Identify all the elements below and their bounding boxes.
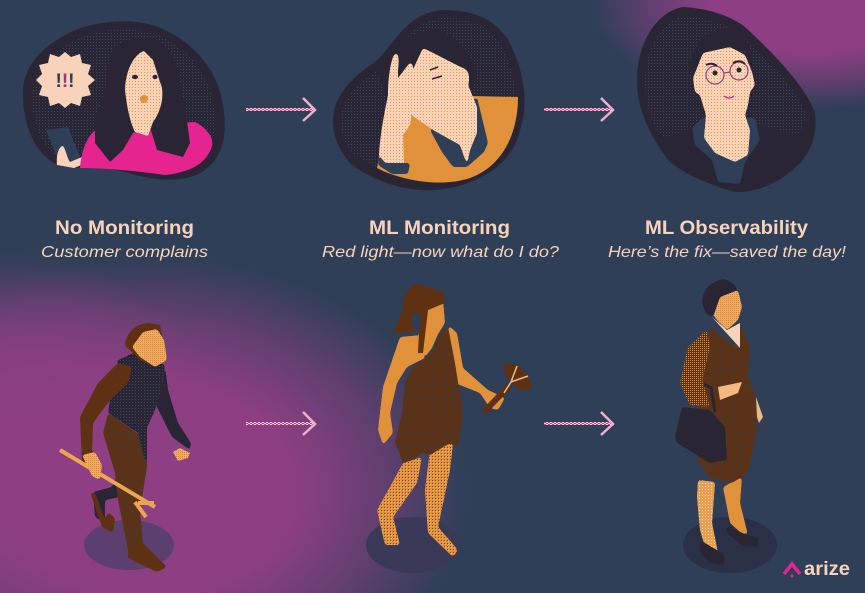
neck and face bbox=[400, 48, 477, 165]
eyes and mouth bbox=[706, 61, 745, 98]
icon: speech burst: !!! bbox=[56, 71, 74, 92]
caption: here's the fix: Here’s the fix—saved the day! bbox=[608, 244, 847, 261]
heading: ml observability: ML Observability bbox=[645, 218, 808, 239]
shadow bbox=[84, 520, 174, 570]
sleeve bbox=[680, 330, 710, 407]
back leg bbox=[723, 477, 748, 535]
dark arm bbox=[155, 365, 191, 450]
icon: arize arrow bbox=[784, 564, 800, 574]
eye bbox=[430, 67, 442, 79]
hair bbox=[393, 284, 445, 353]
figure: early human bbox=[60, 323, 191, 572]
left arm bbox=[378, 335, 425, 445]
face bbox=[415, 300, 445, 357]
arrow: bottom right bbox=[544, 412, 613, 435]
neck and face bbox=[693, 47, 755, 162]
bag bbox=[675, 407, 727, 463]
front shoe bbox=[700, 540, 725, 565]
hair bbox=[377, 30, 477, 95]
arrow: top left bbox=[246, 98, 315, 121]
back leg bbox=[377, 457, 422, 545]
hand bbox=[718, 382, 742, 400]
right hand bbox=[756, 397, 763, 423]
pink top bbox=[80, 122, 212, 175]
hand and arm bbox=[379, 54, 413, 163]
cuff bbox=[378, 155, 410, 174]
panel: ml observability portrait bbox=[637, 7, 816, 192]
panel: ml monitoring portrait bbox=[333, 10, 525, 190]
caption: customer complains: Customer complains bbox=[41, 244, 208, 261]
eyes and mouth bbox=[132, 75, 158, 103]
club bbox=[60, 450, 155, 517]
shadow bbox=[366, 517, 460, 573]
front leg bbox=[425, 443, 458, 557]
left hand bbox=[82, 452, 102, 480]
arrow: top right bbox=[544, 98, 613, 121]
jacket and skirt bbox=[695, 323, 757, 483]
collar bbox=[692, 118, 760, 184]
right arm bbox=[448, 325, 505, 410]
foot bbox=[128, 543, 167, 572]
right hand bbox=[173, 448, 190, 461]
front leg bbox=[697, 480, 718, 553]
hair bbox=[690, 28, 753, 75]
torso bbox=[108, 353, 165, 470]
face bbox=[125, 51, 162, 136]
shirt bbox=[377, 96, 518, 183]
face bbox=[132, 329, 167, 367]
brown arm bbox=[80, 363, 132, 473]
hair bbox=[702, 279, 738, 317]
bag strap bbox=[704, 384, 715, 412]
front leg bbox=[103, 413, 167, 572]
figure: cave woman bbox=[366, 284, 532, 573]
heading: ml monitoring: ML Monitoring bbox=[369, 218, 510, 239]
back leg bbox=[93, 473, 120, 523]
logo dot bbox=[790, 574, 794, 578]
head bbox=[125, 323, 167, 367]
shirt bbox=[712, 317, 740, 348]
shadow bbox=[683, 517, 777, 573]
hand bbox=[57, 146, 84, 168]
glasses bbox=[706, 62, 748, 84]
figure: business woman bbox=[675, 279, 777, 573]
logo: arize bbox=[784, 559, 850, 580]
dress bbox=[395, 327, 463, 463]
collar bbox=[430, 97, 488, 167]
arrow: bottom left bbox=[246, 412, 315, 435]
face bbox=[708, 290, 742, 330]
hair bbox=[95, 37, 190, 162]
panel: no monitoring portrait bbox=[23, 21, 225, 180]
icon: phone bbox=[46, 127, 82, 168]
icon: speech burst bbox=[36, 52, 95, 108]
caption: red light: Red light—now what do I do? bbox=[322, 244, 559, 261]
heading: no monitoring: No Monitoring bbox=[55, 218, 194, 239]
logo wordmark: arize bbox=[804, 559, 850, 580]
axe bbox=[484, 363, 532, 412]
back foot bbox=[90, 492, 115, 533]
back shoe bbox=[727, 525, 758, 547]
